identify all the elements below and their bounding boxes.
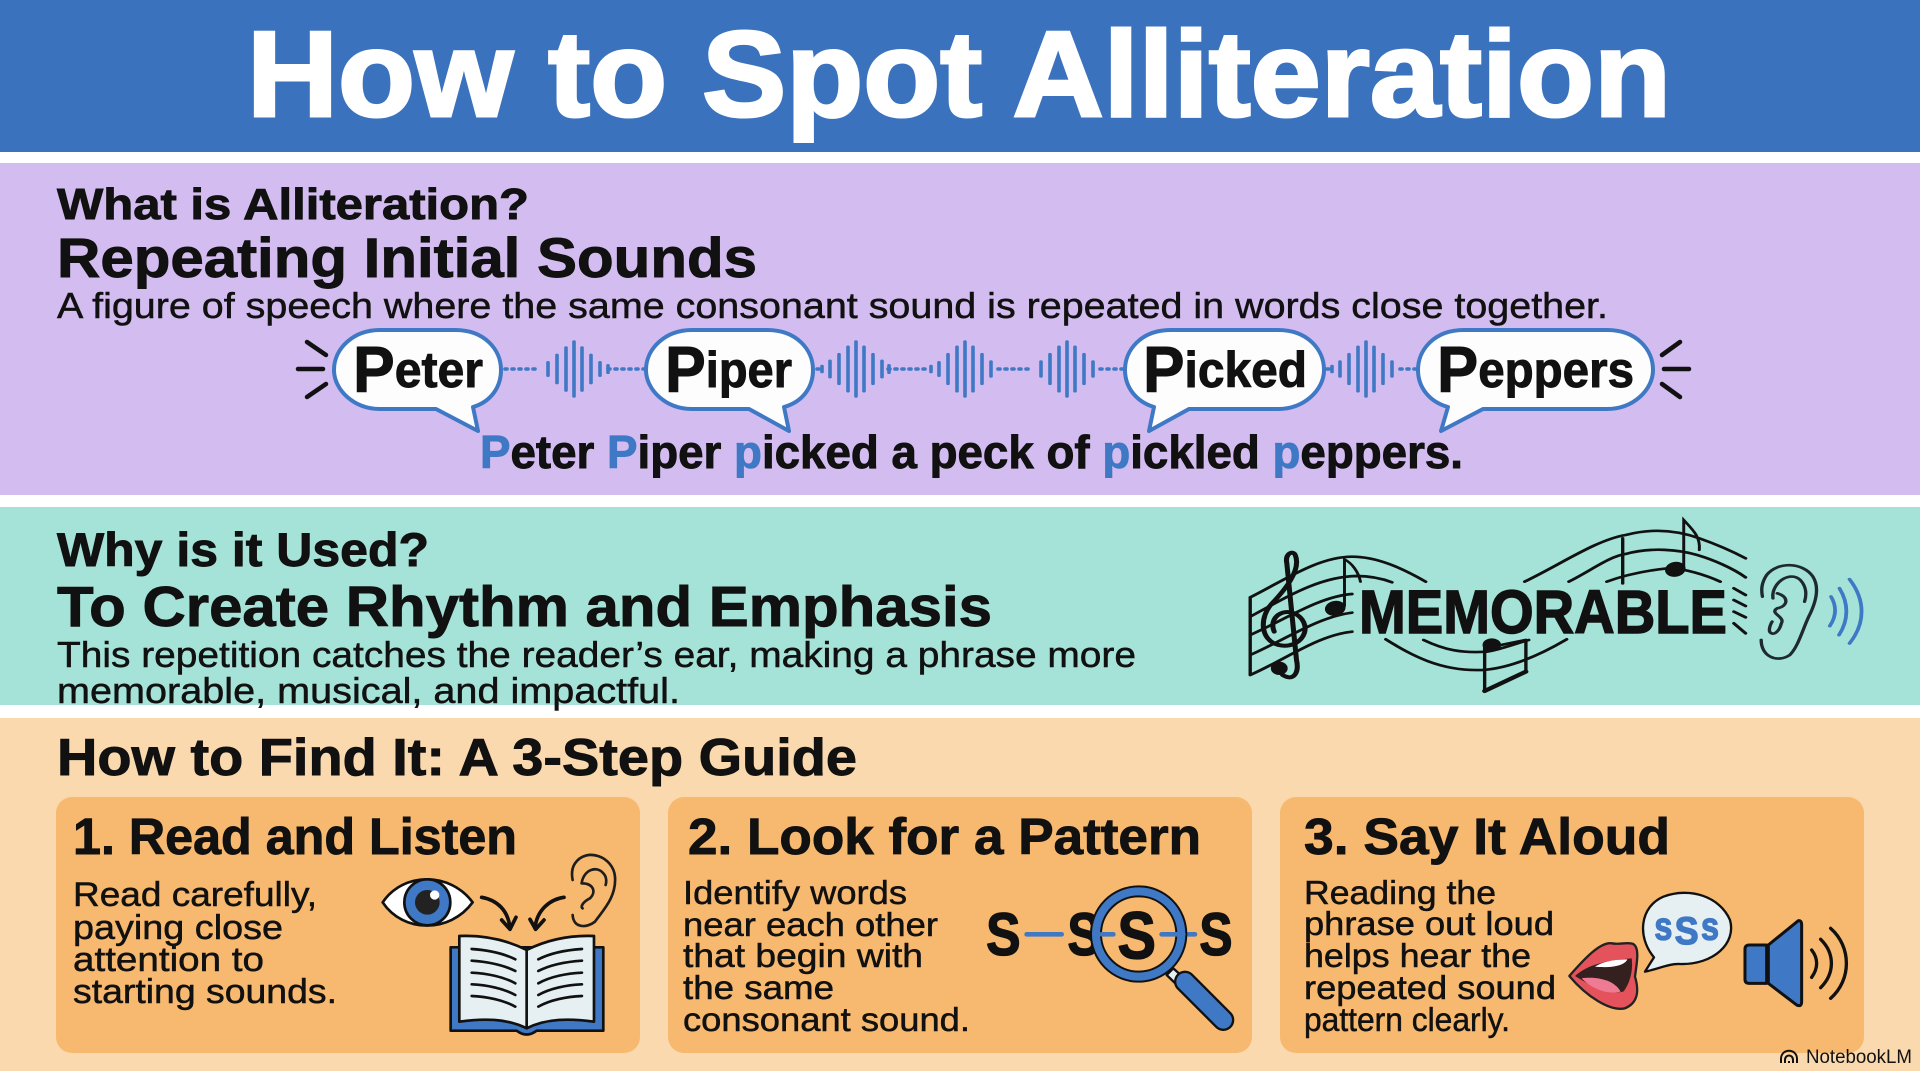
step 3 text: Reading the — [1304, 874, 1496, 911]
step 2 title: 2. Look for a Pattern — [688, 808, 1201, 865]
heading: why is it used: Why is it Used? — [57, 523, 429, 576]
subheading: rhythm and emphasis: To Create Rhythm and Emphasis — [57, 575, 992, 639]
icon: sound waves — [505, 342, 1417, 396]
icon: mouth, speech bubble and speaker: s — [1654, 904, 1672, 948]
step 1 text — [73, 876, 337, 1011]
icon: left emphasis rays — [298, 342, 326, 397]
speech bubble: Picked: P — [1143, 333, 1185, 406]
step 1 title: 1. Read and Listen — [73, 808, 517, 865]
icon: magnifier over S letters: S — [1199, 901, 1233, 968]
card: step 1 — [56, 797, 640, 1053]
speech bubble: Peter: eter — [395, 342, 483, 398]
step 3 title: 3. Say It Aloud — [1304, 808, 1670, 865]
step 3 text: pattern clearly. — [1304, 1001, 1510, 1038]
card: step 2 — [668, 797, 1252, 1053]
icon: mouth, speech bubble and speaker: s — [1701, 904, 1719, 948]
heading: 3-step guide: How to Find It: A 3-Step Guide — [57, 729, 857, 787]
NotebookLM logo and label: NotebookLM — [1806, 1047, 1912, 1068]
step 1 text: starting sounds. — [73, 973, 337, 1011]
speech bubble: Picked: icked — [1185, 342, 1307, 398]
definition text: A figure of speech where the same consonant sound is repeated in words close together. — [57, 285, 1608, 326]
panel: how to find it — [0, 718, 1920, 1071]
icon: magnifier over S letters: S — [1117, 899, 1156, 973]
step 3 text: phrase out loud — [1304, 905, 1554, 942]
speech bubble: Piper: iper — [706, 342, 792, 398]
speech bubble: Peppers: eppers — [1478, 342, 1634, 398]
speech bubble: Picked — [1125, 330, 1324, 431]
speech bubble: Piper — [646, 330, 813, 431]
icon: eye, ear and open book — [383, 855, 615, 1034]
step 2 text: Identify words — [683, 874, 907, 911]
icon: magnifier over S letters — [986, 891, 1233, 1020]
speech bubble: Peter: P — [353, 333, 395, 406]
heading: what is alliteration: What is Alliteration? — [57, 180, 529, 229]
icon: mouth, speech bubble and speaker — [1569, 893, 1846, 1009]
speech bubble: Piper: P — [665, 333, 706, 406]
word: MEMORABLE: MEMORABLE — [1359, 578, 1727, 646]
header band — [0, 0, 1920, 152]
speech bubble: Peter — [334, 330, 501, 431]
title: How to Spot Alliteration — [247, 6, 1671, 142]
icon: mouth, speech bubble and speaker: S — [1675, 909, 1699, 953]
step 2 text — [683, 874, 970, 1038]
step 1 text: attention to — [73, 941, 264, 979]
speech bubble: Peppers: P — [1437, 333, 1478, 406]
icon: magnifier over S letters: S — [986, 901, 1021, 968]
step 2 text: near each other — [683, 906, 938, 943]
example sentence: Peter Piper picked a peck of pickled peppers. — [480, 426, 1463, 478]
panel: why is it used — [0, 507, 1920, 711]
subheading: repeating initial sounds: Repeating Initial Sounds — [57, 226, 757, 289]
step 2 text: that begin with — [683, 937, 923, 974]
icon: magnifier over S letters: S — [1067, 901, 1101, 968]
step 2 text: consonant sound. — [683, 1001, 970, 1038]
panel: what is alliteration — [0, 163, 1920, 495]
speech bubble: Peppers — [1418, 330, 1653, 431]
illustration: memorable music staff — [1250, 520, 1862, 692]
step 1 text: Read carefully, — [73, 876, 317, 914]
step 1 text: paying close — [73, 909, 283, 947]
icon: right emphasis rays — [1662, 342, 1689, 397]
step 3 text: repeated sound — [1304, 969, 1556, 1006]
body text: This repetition catches the reader’s ear, making a phrase more — [57, 634, 1136, 675]
body text — [57, 634, 1136, 711]
body text: memorable, musical, and impactful. — [57, 670, 680, 711]
step 2 text: the same — [683, 969, 834, 1006]
icon: ear with sound — [1761, 565, 1862, 659]
step 3 text — [1304, 874, 1556, 1038]
card: step 3 — [1280, 797, 1864, 1053]
step 3 text: helps hear the — [1304, 937, 1531, 974]
